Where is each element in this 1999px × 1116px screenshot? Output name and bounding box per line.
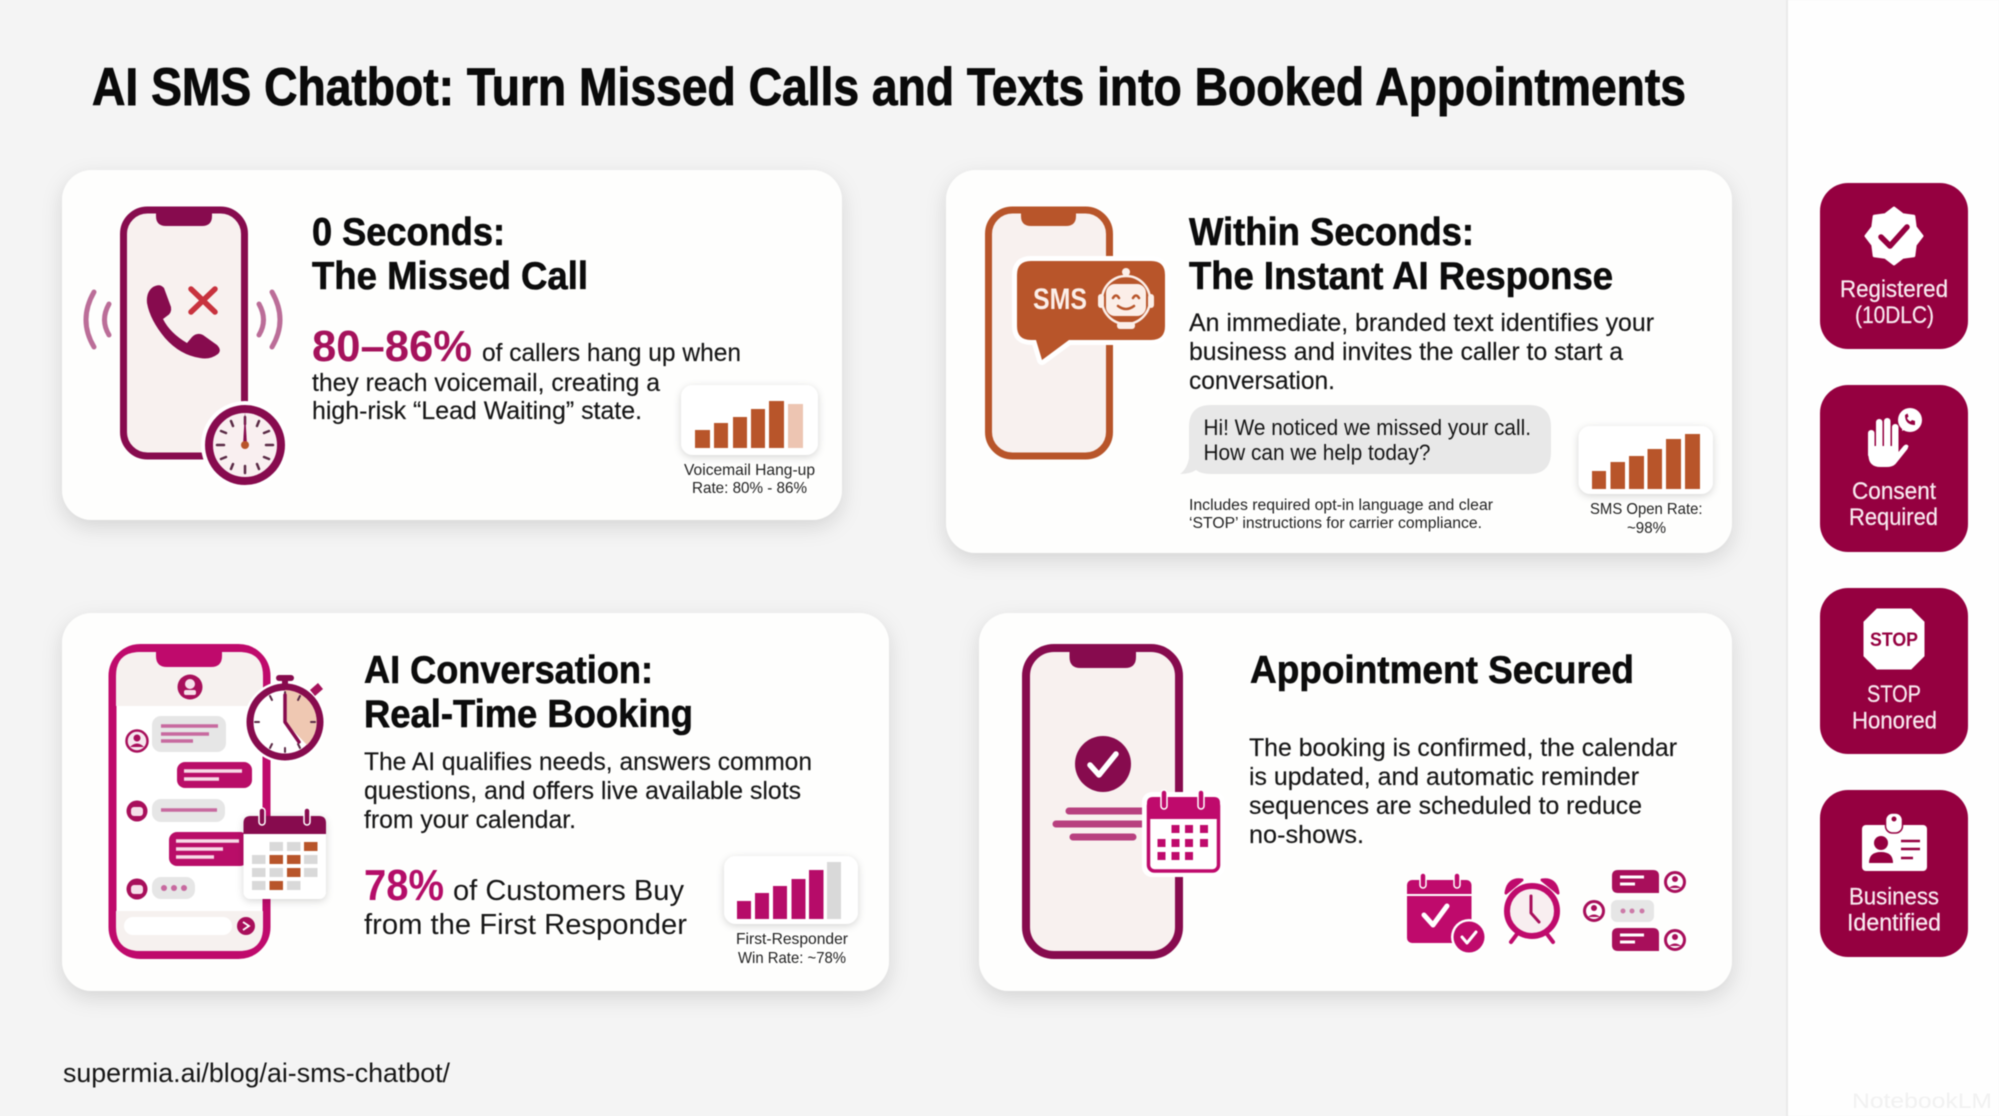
card background — [946, 170, 1732, 553]
icon: stopwatch dial — [201, 401, 289, 489]
icon: ID badge — [1862, 813, 1927, 871]
stat text — [312, 322, 741, 425]
body text — [364, 748, 812, 834]
stat text: from the First Responder — [364, 909, 687, 941]
panel: within seconds, the instant AI response — [946, 170, 1732, 553]
badge: STOP honored — [1820, 588, 1968, 754]
chart caption — [1590, 501, 1702, 537]
heading: The Instant AI Response — [1189, 255, 1613, 298]
body text — [1249, 734, 1677, 849]
body text: The AI qualifies needs, answers common — [364, 748, 812, 776]
stat text: 78% — [364, 861, 444, 910]
icon: SMS robot speech bubble — [1017, 261, 1165, 360]
badge: business identified: Identified — [1847, 910, 1941, 936]
body text: conversation. — [1189, 367, 1335, 395]
chat bubble: Hi! We noticed we missed your call. — [1204, 415, 1531, 440]
card background — [62, 170, 842, 520]
source link: supermia.ai/blog/ai-sms-chatbot/ — [63, 1058, 450, 1088]
badge: registered 10DLC — [1820, 183, 1968, 349]
bar chart: first-responder win rate — [724, 856, 858, 924]
chart caption: ~98% — [1627, 520, 1666, 537]
chart caption: SMS Open Rate: — [1590, 501, 1702, 518]
body text: no-shows. — [1249, 821, 1364, 849]
card background — [62, 613, 889, 991]
bar chart: voicemail hang-up rate — [681, 385, 818, 455]
badge: consent required — [1820, 385, 1968, 552]
chart caption: First-Responder — [736, 931, 849, 948]
icon: phone chat conversation — [112, 644, 266, 955]
heading: Appointment Secured — [1250, 649, 1634, 692]
badge: registered 10DLC: (10DLC) — [1855, 302, 1934, 329]
heading — [1189, 211, 1613, 298]
title: AI SMS Chatbot: Turn Missed Calls and Texts into Booked Appointments — [92, 58, 1686, 117]
stat text: 80–86% — [312, 322, 472, 371]
heading: Real-Time Booking — [364, 693, 693, 736]
chart caption — [684, 462, 815, 497]
icon: calendar — [244, 808, 326, 899]
icon: stop sign: STOP — [1870, 630, 1918, 651]
chart caption: Rate: 80% - 86% — [692, 480, 807, 497]
icon: alarm clock — [1506, 880, 1558, 942]
watermark: NotebookLM — [1852, 1090, 1992, 1113]
badge: registered 10DLC: Registered — [1840, 276, 1948, 303]
icon: verified seal — [1866, 208, 1922, 264]
panel: appointment secured — [979, 613, 1732, 991]
chat bubble: How can we help today? — [1204, 440, 1430, 465]
panel: AI conversation, real-time booking — [62, 613, 889, 991]
body text: business and invites the caller to start a — [1189, 338, 1623, 366]
bar chart: SMS open rate — [1578, 426, 1713, 494]
icon: phone with confirmation — [1026, 644, 1179, 955]
panel: 0 seconds, the missed call — [62, 170, 842, 520]
icon: raised hand with phone bubble — [1868, 408, 1922, 467]
icon: phone — [988, 207, 1110, 456]
chart caption — [736, 931, 849, 967]
body text: sequences are scheduled to reduce — [1249, 792, 1642, 820]
badge: consent required: Consent — [1852, 478, 1936, 505]
heading: The Missed Call — [312, 255, 588, 298]
body text: from your calendar. — [364, 806, 576, 834]
badge: business identified — [1820, 790, 1968, 957]
icon: SMS robot speech bubble: SMS — [1033, 283, 1087, 316]
chat bubble — [1180, 405, 1551, 474]
body text: The booking is confirmed, the calendar — [1249, 734, 1677, 762]
stat text — [364, 861, 687, 941]
badge: STOP honored: Honored — [1852, 708, 1937, 734]
stat text: of Customers Buy — [453, 875, 684, 907]
badge: consent required: Required — [1849, 504, 1938, 531]
icon: stopwatch — [244, 675, 326, 763]
heading: 0 Seconds: — [312, 211, 505, 254]
body text: questions, and offers live available slots — [364, 777, 801, 805]
icon: chat reminders — [1584, 870, 1684, 951]
body text: An immediate, branded text identifies your — [1189, 309, 1654, 337]
stat text: of callers hang up when — [482, 339, 741, 367]
icon: calendar check — [1407, 873, 1487, 955]
icon: stop sign — [1864, 609, 1924, 669]
compliance note: ‘STOP’ instructions for carrier compliance. — [1189, 515, 1482, 532]
body text: is updated, and automatic reminder — [1249, 763, 1639, 791]
heading: AI Conversation: — [364, 649, 653, 692]
stat text: high-risk “Lead Waiting” state. — [312, 397, 642, 425]
badge: business identified: Business — [1849, 884, 1939, 910]
compliance note — [1189, 497, 1493, 532]
chart caption: Win Rate: ~78% — [738, 950, 846, 967]
stat text: they reach voicemail, creating a — [312, 369, 660, 397]
chart caption: Voicemail Hang-up — [684, 462, 815, 479]
body text — [1189, 309, 1654, 395]
badge: STOP honored: STOP — [1867, 681, 1921, 708]
icon: calendar — [1142, 790, 1225, 877]
heading — [312, 211, 588, 298]
heading: Within Seconds: — [1189, 211, 1474, 254]
icon: phone with missed call — [86, 207, 280, 456]
heading — [364, 649, 693, 736]
card background — [979, 613, 1732, 991]
compliance note: Includes required opt-in language and clear — [1189, 497, 1493, 514]
